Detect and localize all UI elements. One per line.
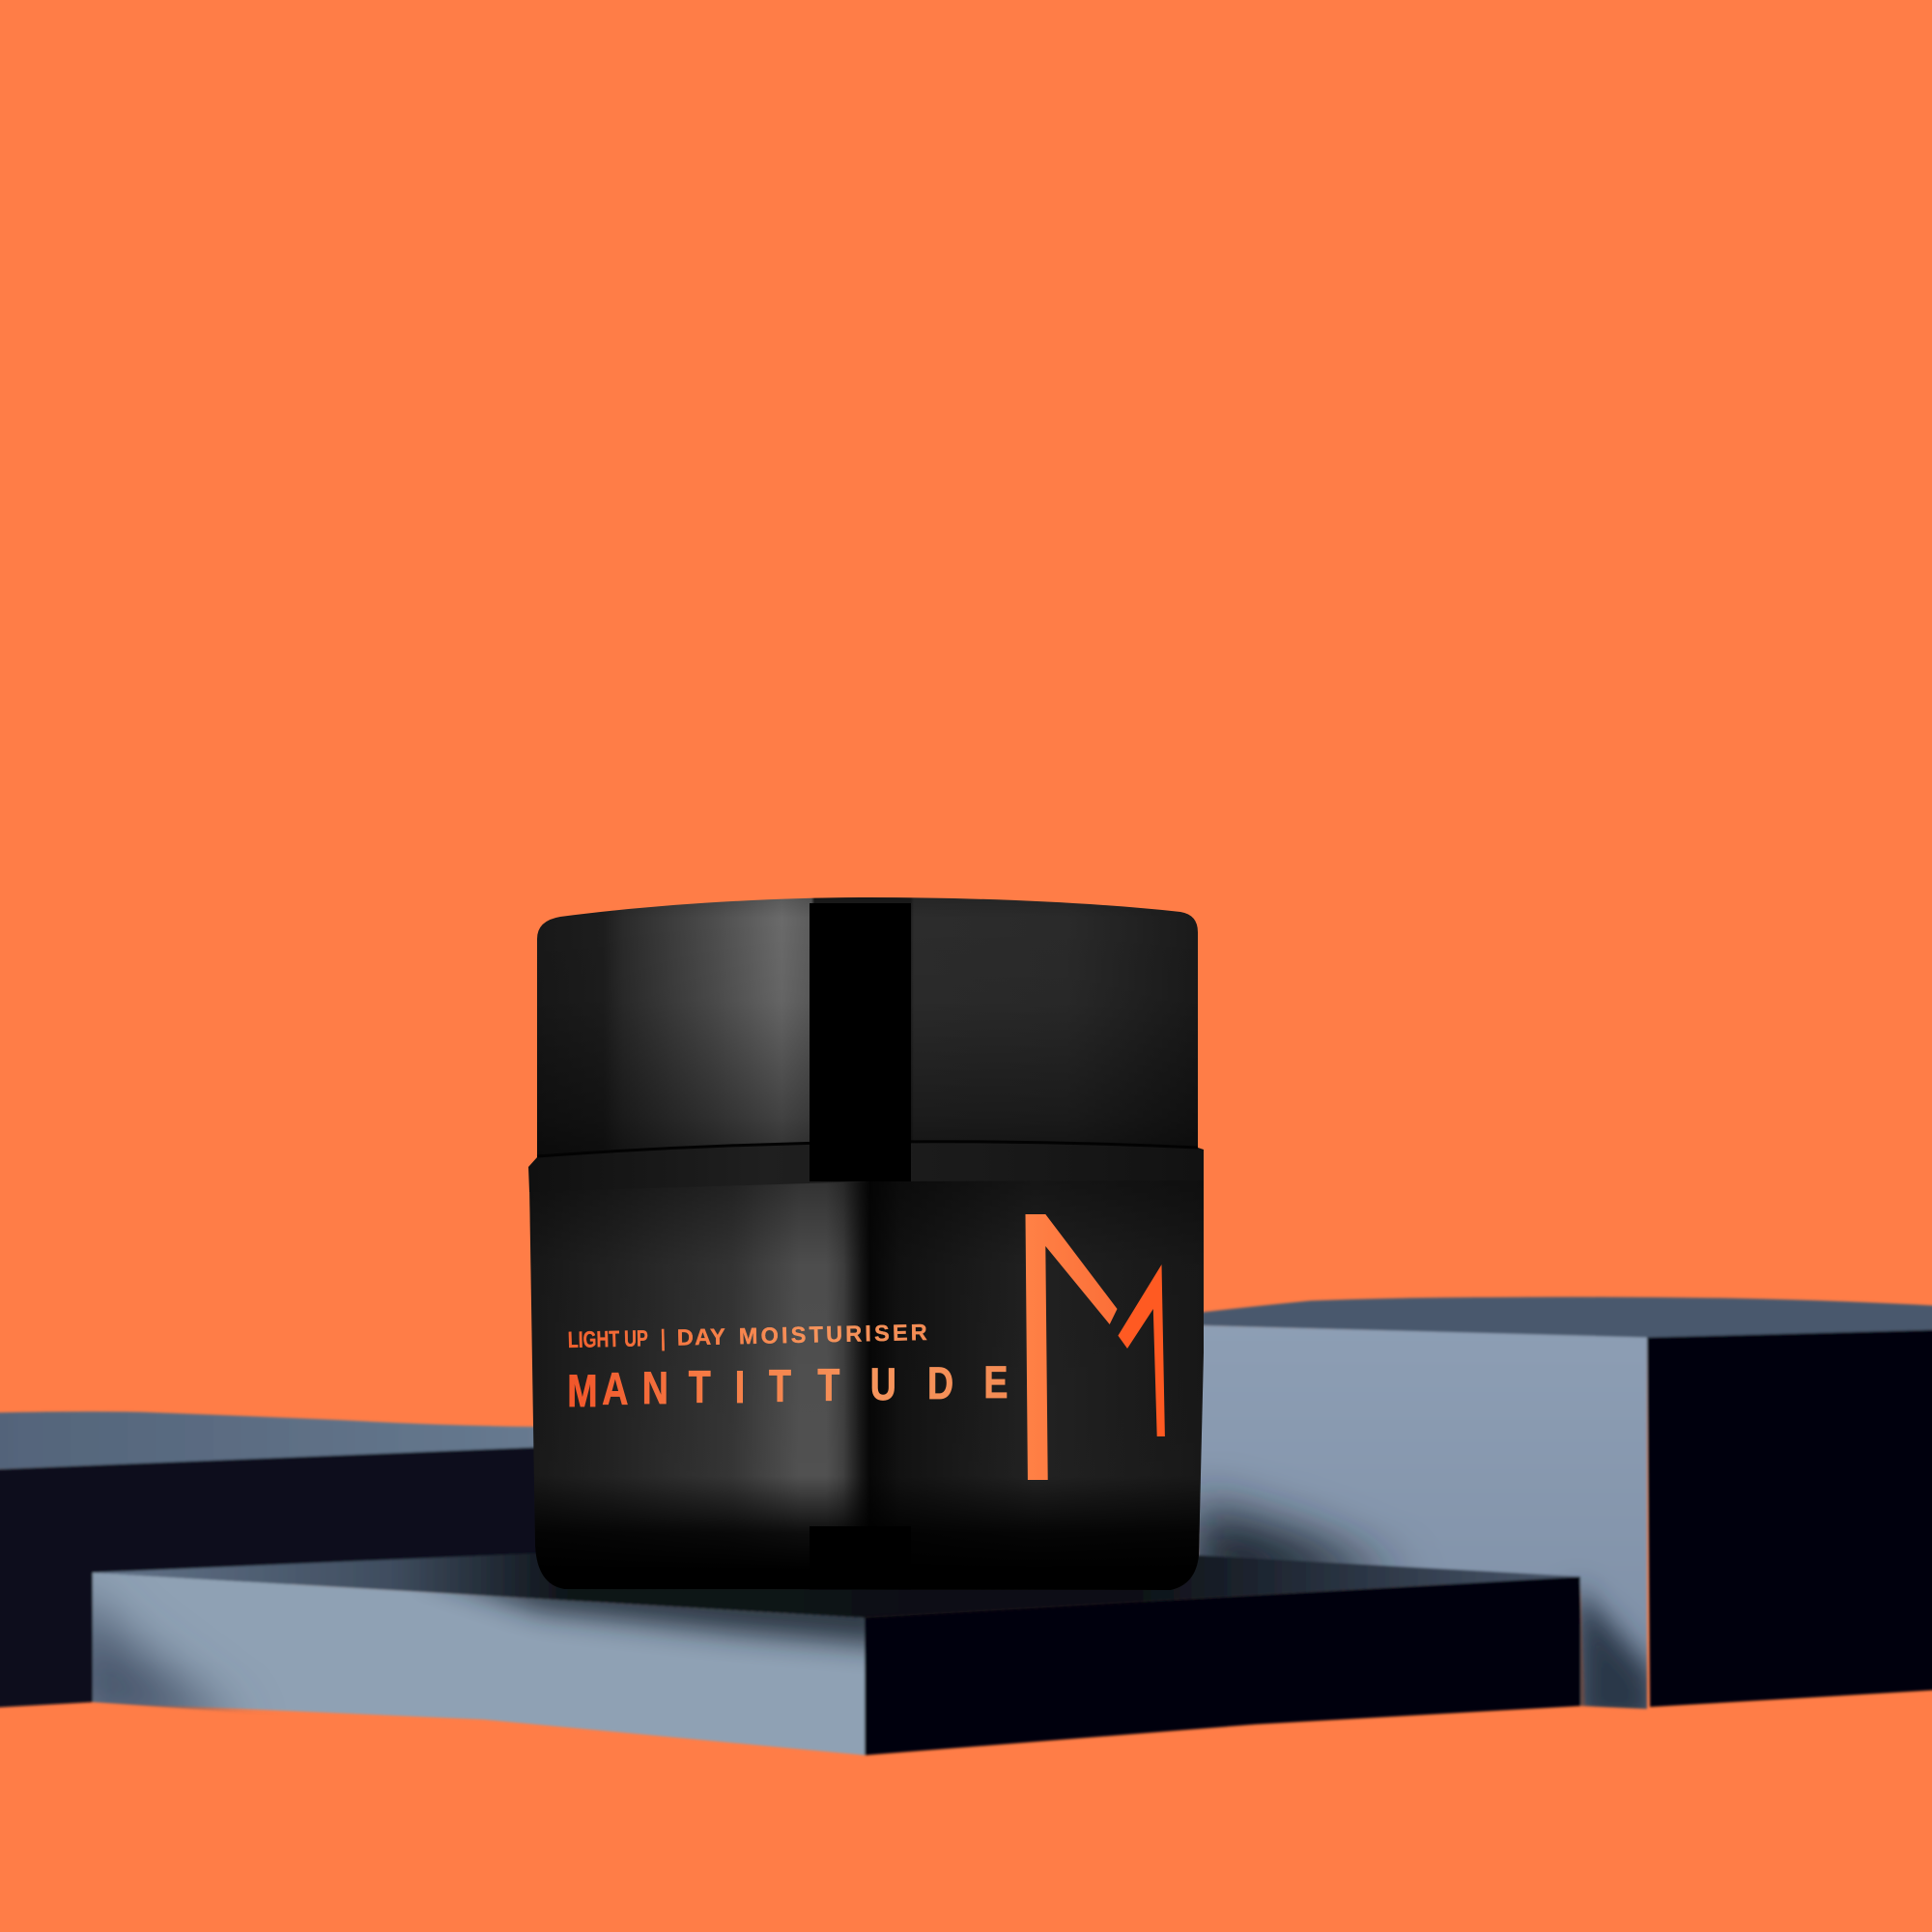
front block top surface	[93, 1553, 1580, 1618]
podium blocks	[0, 1297, 1932, 1755]
front block light face	[68, 1570, 889, 1755]
brand M logo	[1026, 1214, 1165, 1480]
product line text: |	[661, 1325, 666, 1350]
product line text: DAY	[677, 1323, 725, 1350]
back right block dark face	[1647, 1329, 1932, 1707]
back left block dark face	[0, 1447, 541, 1709]
back right block top surface	[1198, 1297, 1932, 1338]
lid seam	[537, 1142, 1198, 1156]
jar body	[529, 1179, 1204, 1590]
front block dark face	[865, 1577, 1580, 1755]
product jar	[528, 897, 1204, 1590]
back right block light face	[1193, 1325, 1657, 1729]
black reflection strip	[810, 903, 911, 1181]
jar collar band	[528, 1128, 1204, 1192]
back left block top surface	[0, 1411, 541, 1470]
brand name text: MANTITTUDE	[567, 1357, 1008, 1417]
product line text: MOISTURISER	[739, 1320, 927, 1349]
jar lid	[537, 897, 1198, 1156]
product line text: LIGHT UP	[568, 1325, 648, 1352]
